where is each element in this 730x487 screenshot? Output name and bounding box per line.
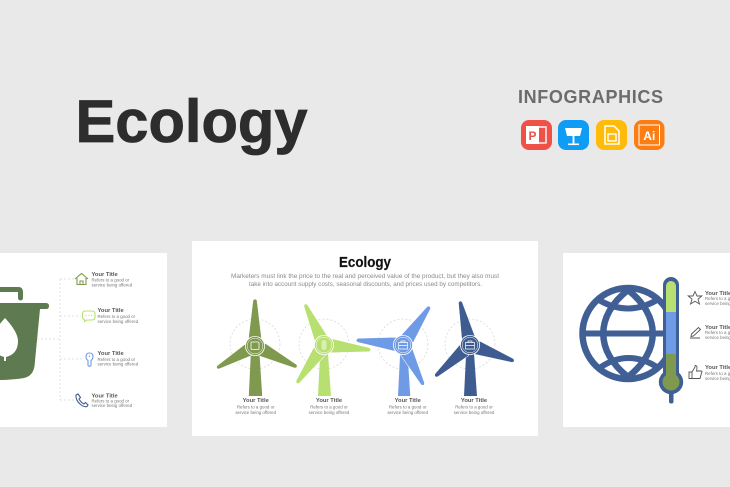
- subtitle: infographics: INFOGRAPHICS: [518, 87, 663, 107]
- panel heading: Ecology: [339, 254, 392, 271]
- icon: keynote: [558, 120, 589, 150]
- turbine 1: olive: [213, 299, 300, 396]
- turbine 3 label: service being offered: [387, 410, 429, 415]
- item text: [98, 308, 139, 324]
- icon: powerpoint: [521, 120, 552, 150]
- turbine 3 label: Your Title: [395, 398, 422, 404]
- panel description: take into account supply costs, seasonal discounts, and prices used by competitors.: [249, 281, 482, 288]
- item text: service being offered: [92, 282, 133, 288]
- turbine 4 label: service being offered: [454, 410, 495, 415]
- icon: powerpoint: P: [528, 129, 537, 143]
- connector lines: [37, 279, 84, 400]
- item text: Your Title: [92, 272, 118, 278]
- icon: pencil: [690, 328, 700, 338]
- item text: Your Title: [98, 351, 124, 357]
- item text: service being offered: [98, 362, 139, 366]
- icon: chart window: [251, 342, 259, 350]
- item text: service being offered: [98, 319, 139, 324]
- icon: house: [75, 274, 88, 284]
- icon: thumbs up: [689, 366, 702, 378]
- turbine 1 label: Your Title: [243, 398, 270, 404]
- icon: globe: [582, 288, 674, 379]
- item: pencil: [690, 325, 730, 340]
- icon: phone: [76, 394, 88, 407]
- item: thumbs up: [689, 365, 730, 381]
- icon: illustrator: Ai: [643, 129, 655, 143]
- turbine 4 label: Refers to a good or: [455, 404, 493, 410]
- item: phone: [76, 394, 133, 408]
- icon: bottle: [322, 340, 326, 350]
- turbine 2 label: Your Title: [316, 398, 343, 404]
- icon: star: [688, 292, 702, 304]
- item text: [92, 272, 133, 288]
- turbine 2: lime: [291, 301, 371, 396]
- item text: [705, 365, 730, 381]
- item: house: [75, 272, 133, 288]
- panel: center slide, wind turbines: [192, 241, 538, 436]
- app icons row: [521, 120, 664, 150]
- item: star: [688, 291, 730, 306]
- item text: Refers to a good or: [98, 314, 136, 319]
- turbine 1 label: service being offered: [235, 410, 277, 415]
- icon: slides: [596, 120, 627, 150]
- title: Ecology: [76, 88, 308, 155]
- item text: [705, 291, 730, 306]
- turbine 3: blue: [356, 302, 436, 396]
- panel description: [231, 273, 499, 288]
- panel: left slide, bucket: [0, 253, 167, 427]
- item text: Refers to a good or: [92, 278, 130, 283]
- panel: right slide, globe thermometer: [563, 253, 730, 427]
- turbine 2 label: [309, 398, 350, 415]
- icon: briefcase: [398, 341, 408, 349]
- turbine 4: navy: [430, 300, 517, 396]
- item text: Refers to a good or: [98, 357, 136, 362]
- item: chat: [82, 308, 139, 324]
- icon: illustrator: [634, 120, 664, 150]
- turbine 2 label: Refers to a good or: [310, 404, 348, 410]
- item text: [705, 325, 730, 340]
- icon: key: [86, 353, 93, 366]
- turbine 2 label: service being offered: [309, 410, 350, 415]
- item text: [92, 394, 133, 408]
- turbine 4 label: [454, 398, 495, 415]
- icon: briefcase: [466, 341, 474, 349]
- turbine 1 label: [235, 398, 277, 415]
- turbine 1 label: Refers to a good or: [237, 404, 275, 410]
- item text: Your Title: [92, 394, 118, 400]
- turbine 3 label: [387, 398, 429, 415]
- item text: [98, 351, 139, 366]
- item text: Refers to a good or: [92, 398, 130, 404]
- item: key: [86, 351, 139, 366]
- icon: speech bubble: [82, 311, 95, 322]
- icon: thermometer: [659, 277, 683, 404]
- turbine 4 label: Your Title: [461, 398, 488, 404]
- item text: Your Title: [98, 308, 124, 314]
- icon: recycling bucket: [0, 290, 49, 380]
- item text: service being offered: [92, 403, 133, 408]
- turbine 3 label: Refers to a good or: [389, 404, 427, 410]
- panel description: Marketers must link the price to the real and perceived value of the product, but they also must: [231, 273, 499, 280]
